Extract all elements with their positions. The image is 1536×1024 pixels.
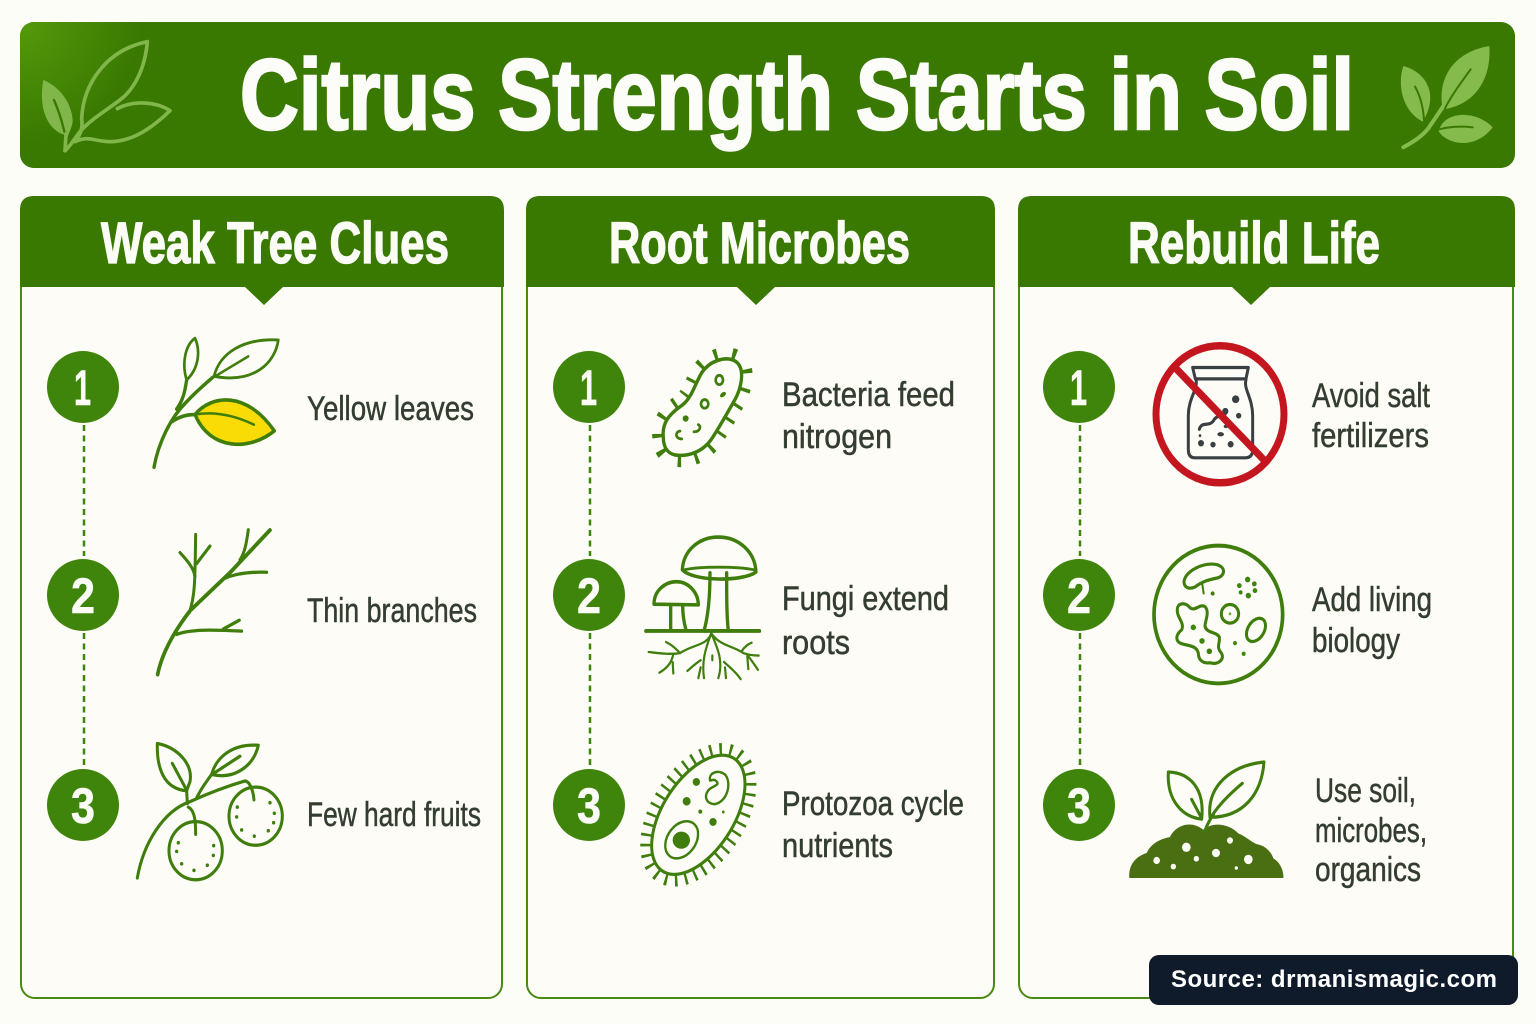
step 1 badge [1043,351,1115,423]
source badge [1149,955,1518,1005]
text: avoid salt fertilizers: fertilizers [1312,417,1429,455]
step 1 badge: 1 [580,360,597,416]
step 1 badge [553,351,625,423]
text: add living biology [1312,581,1432,660]
icon: mushrooms with roots [646,537,759,679]
text: use soil microbes organics: Use soil, [1315,772,1416,810]
text: fungi extend roots [782,580,949,662]
text: bacteria feed nitrogen: Bacteria feed [782,376,955,414]
step 3 badge [47,769,119,841]
panel: weak tree clues [20,196,504,998]
step 3 badge: 3 [577,778,601,834]
step 2 badge: 2 [71,568,95,624]
text: bacteria feed nitrogen: nitrogen [782,418,892,456]
text: protozoa cycle nutrients [782,785,964,865]
label: few hard fruits: Few hard fruits [307,796,481,834]
title banner [20,22,1515,168]
label: yellow leaves: Yellow leaves [307,390,474,428]
step 2 badge [553,559,625,631]
icon: bacteria [663,359,742,455]
panel header: weak tree clues: Weak Tree Clues [101,211,449,276]
step 1 badge [47,351,119,423]
step 2 badge [1043,559,1115,631]
text: use soil microbes organics: organics [1315,851,1421,889]
step 3 badge: 3 [71,778,95,834]
panel header: rebuild life [1018,196,1515,305]
step 2 badge: 2 [577,568,601,624]
source badge: Source: drmanismagic.com [1171,966,1497,993]
panel header: rebuild life: Rebuild Life [1128,211,1380,276]
step 1 badge: 1 [74,360,91,416]
step 3 badge [1043,769,1115,841]
text: use soil microbes organics: microbes, [1315,812,1427,850]
icon: protozoa [628,733,768,897]
label: thin branches: Thin branches [307,592,477,630]
icon: thin branches [158,530,270,674]
step 2 badge [47,559,119,631]
panel: rebuild life [1018,196,1515,998]
text: bacteria feed nitrogen [782,376,955,456]
icon: solid leaves right [1401,46,1493,147]
panel header: weak tree clues [20,196,504,305]
icon: no salt fertilizer [1156,346,1284,483]
text: add living biology: biology [1312,622,1400,660]
text: fungi extend roots: roots [782,624,850,662]
icon: few hard fruits [137,743,282,880]
text: protozoa cycle nutrients: Protozoa cycle [782,785,964,823]
step 3 badge [553,769,625,841]
panel: root microbes [526,196,995,998]
step 1 badge: 1 [1070,360,1087,416]
text: avoid salt fertilizers: Avoid salt [1312,377,1430,415]
step 3 badge: 3 [1067,778,1091,834]
icon: seedling in soil [1129,762,1283,878]
panel header: root microbes: Root Microbes [609,211,910,276]
icon: yellow leaf branch [154,338,278,467]
text: protozoa cycle nutrients: nutrients [782,827,893,865]
text: avoid salt fertilizers [1312,377,1430,455]
panel header: root microbes [526,196,995,305]
icon: outlined leaves left [42,42,170,151]
text: use soil microbes organics [1315,772,1427,889]
text: add living biology: Add living [1312,581,1432,619]
icon: microbes in petri circle [1154,546,1283,683]
text: fungi extend roots: Fungi extend [782,580,949,618]
step 2 badge: 2 [1067,568,1091,624]
